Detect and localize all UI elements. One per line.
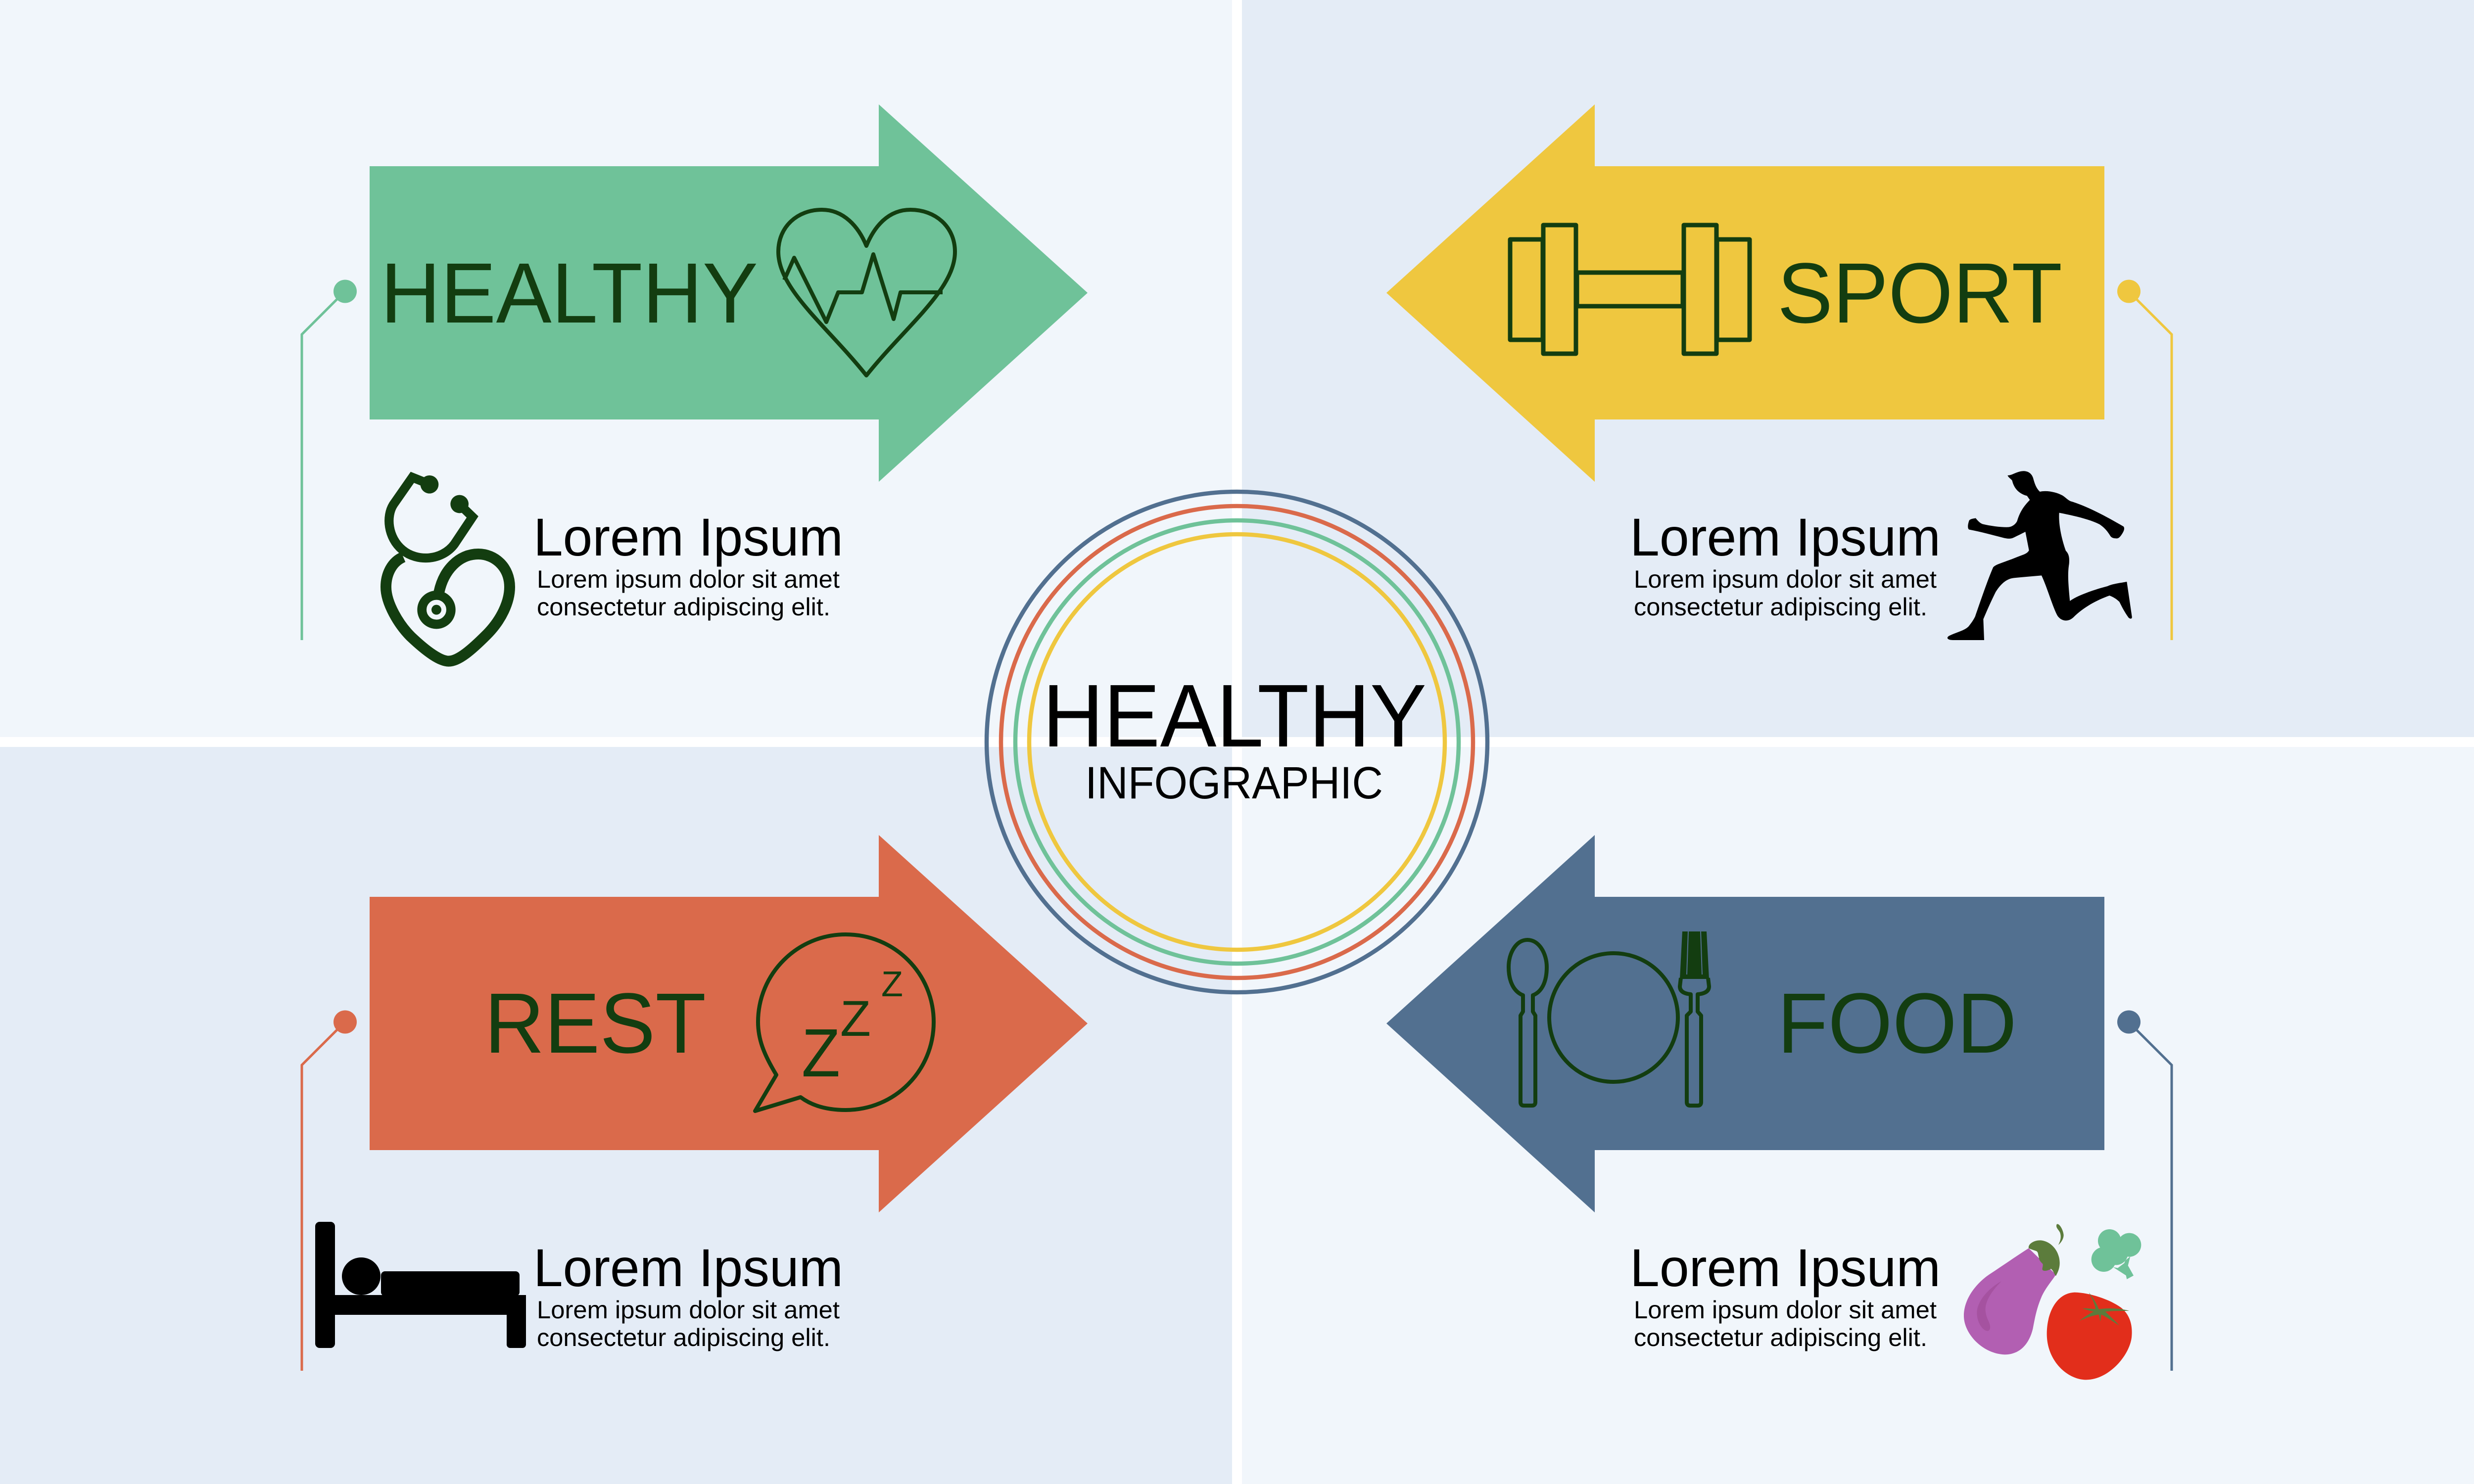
icon: dumbbell xyxy=(1510,225,1750,354)
text block: sport: consectetur adipiscing elit. xyxy=(1634,593,1927,621)
center badge xyxy=(987,492,1487,992)
icon: vegetables xyxy=(1964,1224,2141,1380)
arrow: healthy xyxy=(370,104,1088,482)
text block: rest: Lorem Ipsum xyxy=(533,1238,843,1298)
text block: rest: consectetur adipiscing elit. xyxy=(537,1324,830,1351)
text block: rest: Lorem ipsum dolor sit amet xyxy=(537,1296,840,1324)
text block: food: Lorem ipsum dolor sit amet xyxy=(1634,1296,1937,1324)
text block: food xyxy=(1630,1238,1941,1351)
concentric rings xyxy=(987,492,1487,992)
heading: rest: REST xyxy=(484,975,706,1071)
icon: bed xyxy=(315,1222,526,1348)
connector: sport xyxy=(2117,280,2172,640)
icon: sleep speech bubble: Z xyxy=(881,965,903,1004)
icon: sleep speech bubble: Z xyxy=(802,1015,840,1091)
text block: food: consectetur adipiscing elit. xyxy=(1634,1324,1927,1351)
panel: sport xyxy=(1386,104,2172,640)
icon: stethoscope xyxy=(386,475,510,661)
text block: healthy xyxy=(533,507,843,621)
panel: healthy xyxy=(302,104,1088,661)
text block: healthy: consectetur adipiscing elit. xyxy=(537,593,830,621)
arrow: rest xyxy=(370,835,1088,1212)
heading: healthy: HEALTHY xyxy=(381,245,758,341)
text block: sport xyxy=(1630,507,1941,621)
icon: sleep speech bubble: Z xyxy=(840,990,871,1047)
panel: rest xyxy=(302,835,1088,1371)
arrow: food xyxy=(1386,835,2104,1212)
eggplant xyxy=(1964,1224,2064,1354)
connector: food xyxy=(2117,1010,2172,1371)
tomato xyxy=(2047,1293,2132,1380)
panel: food xyxy=(1386,835,2172,1380)
text block: sport: Lorem ipsum dolor sit amet xyxy=(1634,565,1937,593)
connector: healthy xyxy=(302,280,357,640)
icon: runner xyxy=(1948,471,2132,640)
text block: healthy: Lorem Ipsum xyxy=(533,507,843,567)
text block: rest xyxy=(533,1238,843,1351)
icon: sleep speech bubble xyxy=(755,934,934,1111)
text block: healthy: Lorem ipsum dolor sit amet xyxy=(537,565,840,593)
subtitle: INFOGRAPHIC xyxy=(1085,758,1383,808)
title: HEALTHY xyxy=(1043,666,1427,766)
text block: food: Lorem Ipsum xyxy=(1630,1238,1941,1298)
icon: plate with spoon and fork xyxy=(1509,931,1709,1106)
broccoli xyxy=(2092,1229,2141,1279)
heading: food: FOOD xyxy=(1777,975,2017,1071)
heading: sport: SPORT xyxy=(1777,245,2062,341)
icon: heart with pulse xyxy=(778,210,955,375)
arrow: sport xyxy=(1386,104,2104,482)
text block: sport: Lorem Ipsum xyxy=(1630,507,1941,567)
connector: rest xyxy=(302,1010,357,1371)
